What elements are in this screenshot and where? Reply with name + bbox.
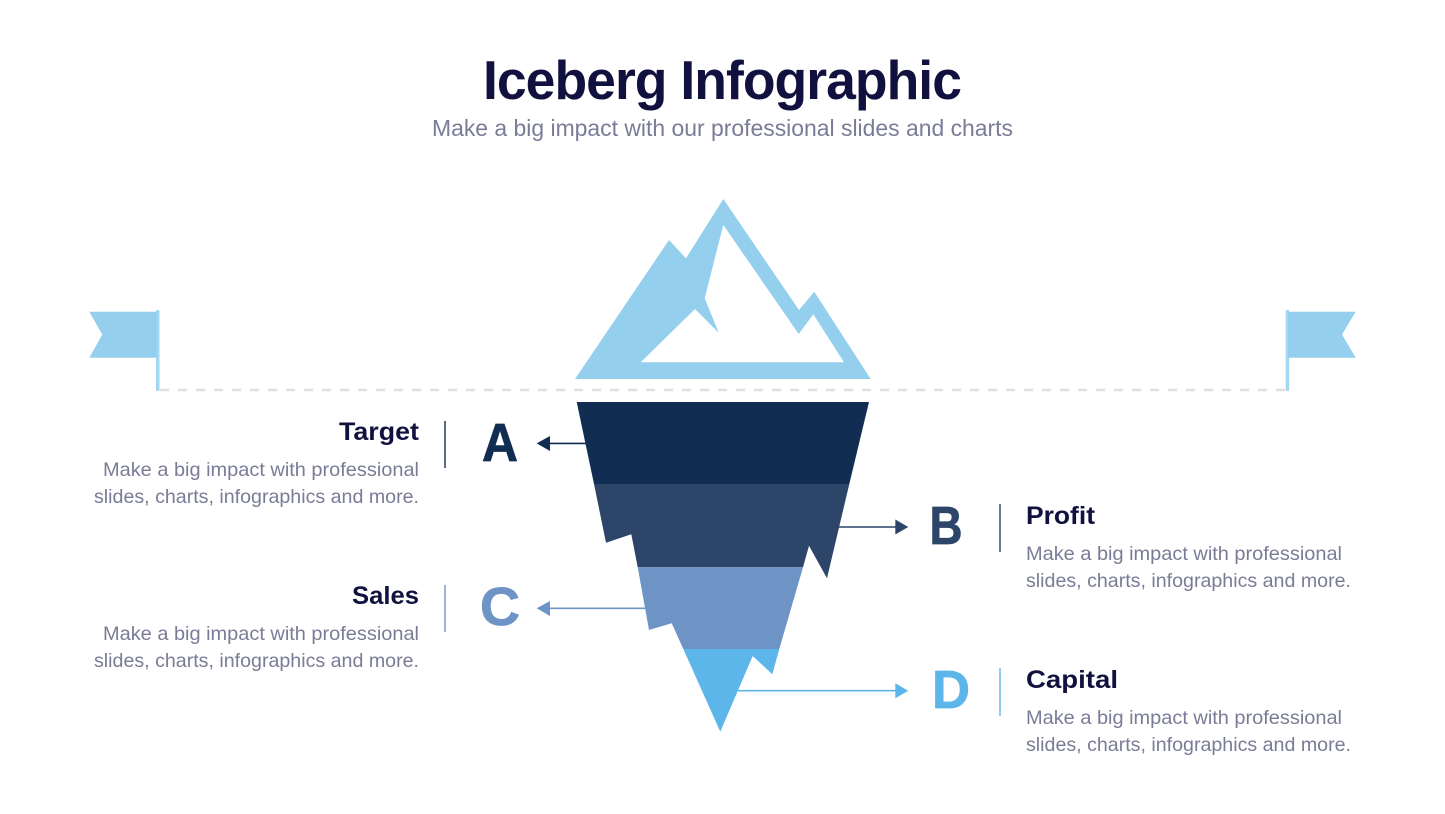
text: Profit description: [1026, 543, 1351, 592]
subtitle: Make a big impact with our professional slides and charts: [432, 115, 1013, 141]
text: Target description: slides, charts, infographics and more.: [94, 486, 419, 508]
arrow B: [839, 520, 908, 534]
heading: Target: Target: [339, 418, 420, 446]
icon: right flag: [1286, 310, 1356, 391]
iceberg underwater layers: [577, 402, 869, 732]
arrow D: [738, 683, 908, 698]
arrow C: [537, 601, 645, 616]
text: Sales description: slides, charts, infographics and more.: [94, 650, 419, 672]
layer C: [638, 567, 803, 649]
icon: left flag: [89, 310, 160, 391]
text: Target description: Make a big impact with professional: [103, 459, 419, 481]
text: Profit description: slides, charts, infographics and more.: [1026, 570, 1351, 592]
layer D: [683, 649, 779, 732]
letter B: B: [930, 496, 962, 556]
text: Target description: [94, 459, 419, 508]
layer B: [594, 484, 849, 578]
panel: Capital: [1026, 666, 1351, 756]
panel: Sales: [94, 582, 419, 672]
text: Sales description: Make a big impact with professional: [103, 623, 419, 645]
text: Capital description: Make a big impact with professional: [1026, 707, 1342, 729]
text: Capital description: slides, charts, infographics and more.: [1026, 734, 1351, 756]
title: Iceberg Infographic: [483, 49, 961, 111]
text: Sales description: [94, 623, 419, 672]
text: Profit description: Make a big impact with professional: [1026, 543, 1342, 565]
layer A: [577, 402, 869, 484]
panel: Target: [94, 418, 420, 508]
iceberg tip above water: [575, 199, 871, 379]
text: Capital description: [1026, 707, 1351, 756]
heading: Capital: Capital: [1026, 666, 1118, 694]
heading: Sales: Sales: [352, 582, 419, 610]
waterline: [160, 389, 1286, 391]
letter C: C: [480, 577, 520, 637]
arrow A: [537, 436, 587, 451]
letter D: D: [932, 660, 970, 720]
letter A: A: [482, 413, 518, 473]
heading: Profit: Profit: [1026, 502, 1096, 530]
panel: Profit: [1026, 502, 1351, 592]
